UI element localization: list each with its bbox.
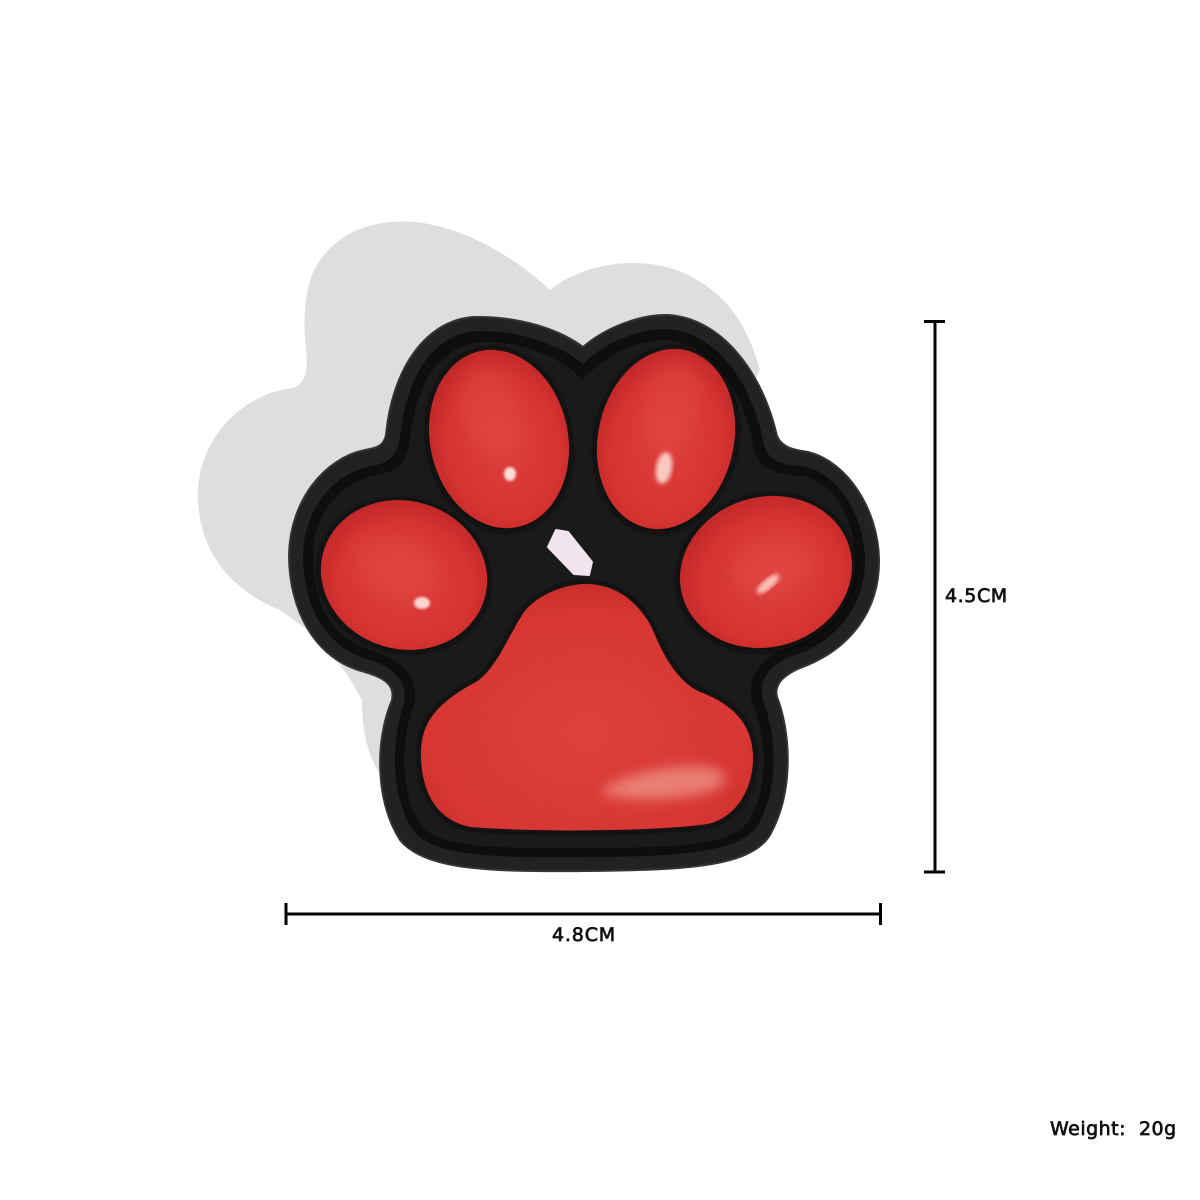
recess floor	[313, 340, 855, 848]
height label: 4.5CM	[945, 585, 1008, 607]
toe pad 3	[299, 478, 509, 674]
candle paw	[289, 315, 879, 871]
vertical dimension line	[924, 320, 945, 874]
black base	[289, 315, 879, 871]
weight label: Weight: 20g	[1050, 1118, 1177, 1140]
width label: 4.8CM	[552, 924, 616, 946]
inner recess	[303, 329, 865, 857]
horizontal dimension line	[284, 903, 882, 925]
paw shadow	[198, 221, 760, 800]
highlights	[414, 451, 782, 799]
toe pad 2	[577, 333, 755, 547]
toe pad 4	[657, 472, 875, 674]
toe pad 1	[409, 334, 589, 546]
wick	[548, 530, 592, 575]
main pad	[421, 584, 753, 830]
